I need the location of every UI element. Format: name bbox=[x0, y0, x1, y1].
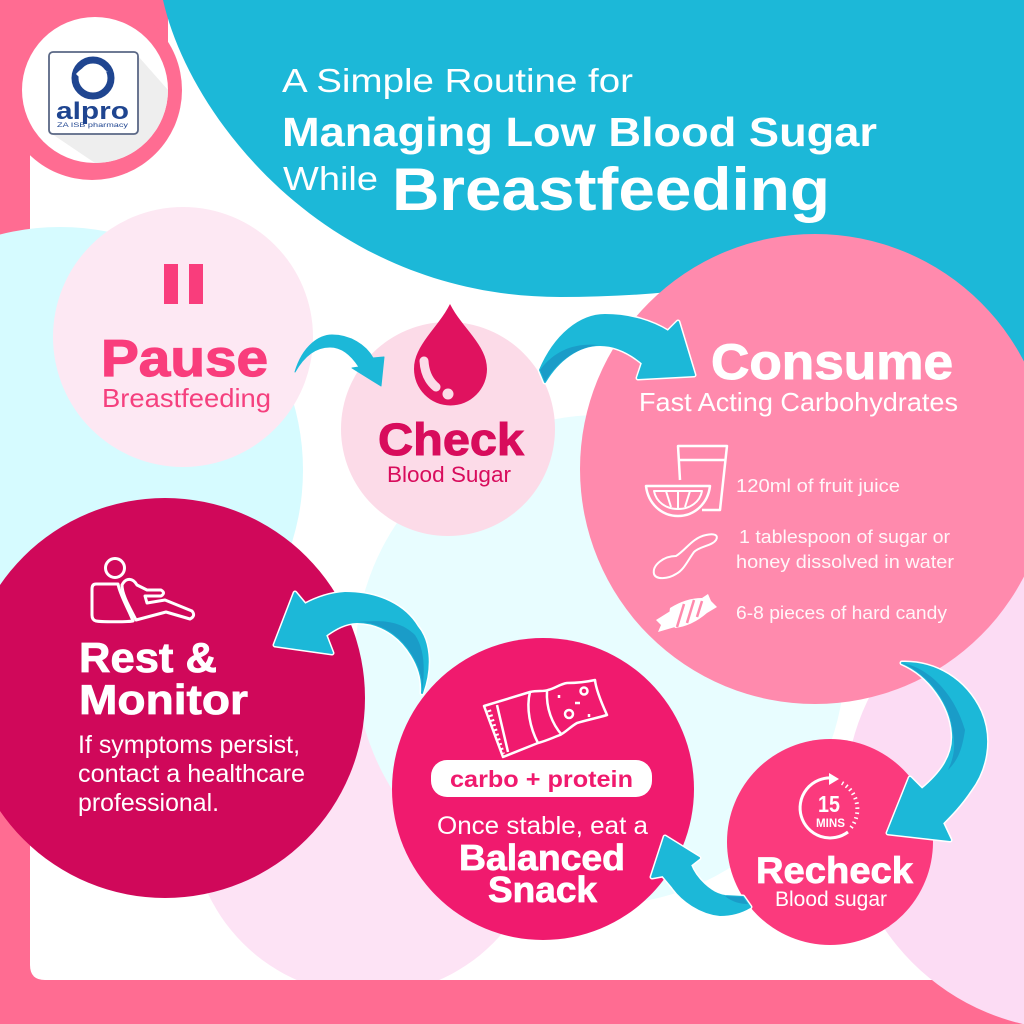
panel: balanced snack bbox=[392, 638, 694, 940]
arrow: recheck to snack bbox=[652, 837, 750, 915]
panel: rest and monitor: Rest & bbox=[79, 634, 217, 681]
logo badge: alpro bbox=[56, 98, 129, 125]
title: A Simple Routine for bbox=[282, 62, 633, 99]
panel: check bbox=[341, 304, 555, 536]
text: tablespoon: 1 tablespoon of sugar or bbox=[739, 527, 950, 547]
arrow: snack to rest bbox=[275, 593, 428, 693]
arrow: pause to check bbox=[295, 335, 384, 386]
text: juice: 120ml of fruit juice bbox=[736, 476, 900, 496]
panel: consume bbox=[580, 234, 1024, 704]
icon: spoon bbox=[654, 534, 717, 578]
panel: check: Blood Sugar bbox=[387, 462, 511, 487]
panel: rest and monitor: professional. bbox=[78, 789, 219, 817]
text: tablespoon bbox=[736, 527, 954, 572]
panel: balanced snack: Once stable, eat a bbox=[437, 812, 648, 840]
panel: recheck: Recheck bbox=[756, 850, 913, 891]
panel: rest and monitor: contact a healthcare bbox=[78, 760, 305, 788]
panel: balanced snack: Snack bbox=[488, 869, 598, 910]
title: Managing Low Blood Sugar bbox=[282, 109, 877, 155]
icon: juice glass and citrus bbox=[646, 446, 727, 516]
arrow: consume to recheck bbox=[888, 663, 986, 840]
icon: 15 minute timer bbox=[800, 773, 857, 838]
icon: 15 minute timer: 15 bbox=[818, 791, 840, 817]
panel: rest and monitor bbox=[0, 498, 365, 898]
icon: 15 minute timer: MINS bbox=[816, 816, 845, 830]
logo badge: ZA ISB pharmacy bbox=[57, 123, 128, 129]
text: candy: 6-8 pieces of hard candy bbox=[736, 603, 947, 623]
text: tablespoon: honey dissolved in water bbox=[736, 552, 954, 572]
arrow: check to consume bbox=[540, 315, 694, 382]
icon: candy bbox=[656, 594, 717, 632]
icon: person resting bbox=[92, 558, 194, 622]
title bbox=[282, 62, 877, 223]
panel: balanced snack: Balanced bbox=[459, 837, 625, 878]
teal header shape bbox=[163, 0, 1024, 400]
icon: pause bbox=[164, 264, 203, 304]
panel: rest and monitor: Monitor bbox=[79, 676, 248, 723]
icon: snack bar bbox=[484, 680, 607, 757]
label pill: carbo + protein: carbo + protein bbox=[450, 766, 633, 792]
panel: rest and monitor: If symptoms persist, bbox=[78, 731, 300, 759]
panel: pause: Breastfeeding bbox=[102, 383, 271, 413]
panel: consume: Consume bbox=[711, 334, 953, 390]
title: Breastfeeding bbox=[392, 156, 830, 223]
panel: check: Check bbox=[378, 414, 525, 465]
panel: pause: Pause bbox=[101, 330, 268, 388]
label pill: carbo + protein bbox=[431, 760, 652, 797]
panel: consume: Fast Acting Carbohydrates bbox=[639, 387, 958, 417]
panel: recheck bbox=[727, 739, 933, 945]
title: While bbox=[283, 160, 378, 197]
icon: blood drop bbox=[414, 304, 487, 406]
panel: recheck: Blood sugar bbox=[775, 888, 887, 911]
panel: pause bbox=[53, 207, 313, 467]
logo badge bbox=[2, 0, 182, 180]
